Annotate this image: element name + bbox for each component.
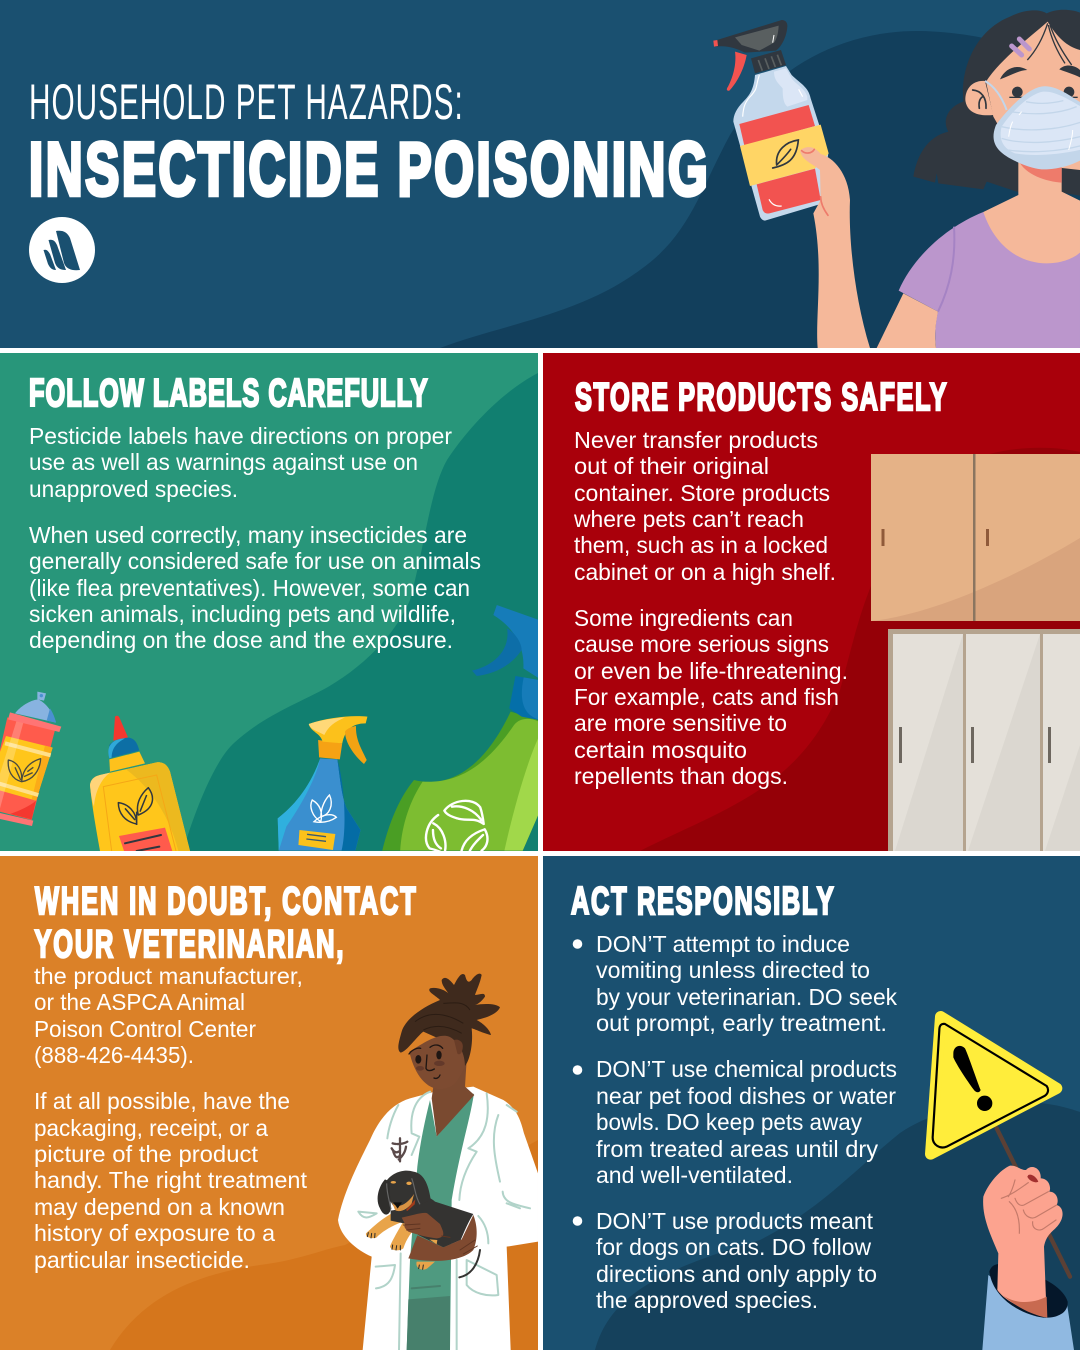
chin shadow — [1020, 163, 1062, 183]
text block: the approved species. — [596, 1287, 818, 1313]
text block: picture of the product — [34, 1141, 259, 1167]
puppy and arm — [366, 1171, 480, 1277]
heading: FOLLOW LABELS CAREFULLY — [29, 370, 428, 414]
text block: particular insecticide. — [34, 1247, 250, 1273]
text block: certain mosquito — [574, 737, 747, 763]
coat lines — [358, 1092, 530, 1350]
illustration: yellow bottle — [90, 716, 190, 851]
text block: or even be life-threatening. — [574, 658, 848, 684]
panel: act responsibly — [543, 856, 1080, 1350]
panel: follow labels carefully — [0, 353, 539, 852]
text block: Pesticide labels have directions on proper — [29, 423, 452, 449]
scrubs — [407, 1093, 474, 1350]
text block: unapproved species. — [29, 476, 238, 502]
text block: the product manufacturer, — [34, 963, 303, 989]
illustration: hand holding warning sign — [931, 1017, 1074, 1350]
arm — [408, 1215, 477, 1261]
text block: use as well as warnings against use on — [29, 449, 418, 475]
eyes — [1009, 87, 1078, 98]
text block: where pets can’t reach — [573, 506, 804, 532]
text block: Poison Control Center — [34, 1016, 256, 1042]
text block: generally considered safe for use on animals — [29, 548, 481, 574]
coat — [338, 1087, 538, 1350]
text block: packaging, receipt, or a — [34, 1115, 269, 1141]
text block: for dogs on cats. DO follow — [596, 1234, 871, 1260]
illustration: pesticide sprayers — [278, 605, 539, 852]
puppy body — [391, 1197, 473, 1247]
text block: out of their original — [574, 453, 769, 479]
green sprayer — [382, 605, 539, 852]
illustration: aerosol can — [0, 692, 61, 826]
neck — [432, 1060, 474, 1137]
text block: DON’T use products meant — [596, 1208, 873, 1234]
hair — [913, 10, 1080, 197]
text block: DON’T attempt to induce — [596, 931, 850, 957]
text block: vomiting unless directed to — [596, 957, 870, 983]
bullets — [573, 939, 582, 1226]
illustration: woman with spray bottle — [713, 10, 1080, 348]
text block: directions and only apply to — [596, 1261, 877, 1287]
text block: them, such as in a locked — [574, 532, 828, 558]
pole — [997, 1128, 1070, 1277]
text block: near pet food dishes or water — [596, 1083, 896, 1109]
illustration: upper cabinet — [871, 454, 1080, 621]
text block: depending on the dose and the exposure. — [29, 627, 453, 653]
puppy head — [385, 1171, 431, 1212]
panel: store products safely — [543, 353, 1080, 851]
emblem — [392, 1138, 407, 1162]
warning sign — [931, 1017, 1057, 1154]
title — [30, 84, 706, 198]
title: HOUSEHOLD PET HAZARDS: — [29, 74, 463, 130]
ear — [965, 81, 1007, 115]
text block: If at all possible, have the — [34, 1088, 290, 1114]
text block: out prompt, early treatment. — [596, 1010, 887, 1036]
hand — [983, 1166, 1063, 1318]
hair bun — [398, 974, 500, 1066]
sleeve — [982, 1264, 1074, 1350]
upper arm — [877, 293, 938, 348]
face — [409, 1036, 465, 1089]
text block: cabinet or on a high shelf. — [574, 559, 836, 585]
illustration: veterinarian with puppy — [338, 974, 538, 1350]
text block — [573, 427, 848, 789]
text block: by your veterinarian. DO seek — [596, 984, 897, 1010]
text block: Never transfer products — [574, 427, 818, 453]
spray bottle — [713, 20, 829, 221]
blue spray bottle — [278, 716, 367, 851]
text block: Some ingredients can — [574, 605, 793, 631]
text block: container. Store products — [574, 480, 830, 506]
text block: repellents than dogs. — [574, 763, 788, 789]
hand — [800, 147, 870, 348]
tail — [459, 1250, 480, 1277]
heading: STORE PRODUCTS SAFELY — [575, 374, 947, 418]
heading: WHEN IN DOUBT, CONTACT — [35, 878, 416, 922]
heading — [34, 878, 416, 965]
title: INSECTICIDE POISONING — [29, 127, 708, 211]
text block: from treated areas until dry — [596, 1136, 878, 1162]
text block: When used correctly, many insecticides are — [29, 522, 467, 548]
icon: logo — [29, 217, 95, 283]
neck and chest — [983, 160, 1080, 267]
text block: DON’T use chemical products — [596, 1056, 897, 1082]
text block: are more sensitive to — [574, 710, 787, 736]
heading: YOUR VETERINARIAN, — [34, 921, 343, 965]
text block: sicken animals, including pets and wildlife, — [29, 601, 456, 627]
text block: For example, cats and fish — [574, 684, 839, 710]
heading: ACT RESPONSIBLY — [571, 878, 834, 922]
face — [986, 22, 1080, 170]
text block: may depend on a known — [34, 1194, 285, 1220]
mask — [994, 86, 1080, 169]
puppy legs — [366, 1213, 435, 1270]
panel: header — [0, 0, 1080, 348]
text block — [34, 963, 307, 1273]
text block — [596, 931, 897, 1313]
text block: (like flea preventatives). However, some can — [29, 575, 470, 601]
text block: (888-426-4435). — [34, 1042, 194, 1068]
sleeve crease — [938, 227, 954, 312]
text block: and well-ventilated. — [596, 1162, 793, 1188]
text block: handy. The right treatment — [34, 1167, 307, 1193]
panel: when in doubt — [0, 856, 538, 1350]
text block: history of exposure to a — [34, 1220, 276, 1246]
hair clip — [1012, 39, 1029, 55]
text block: or the ASPCA Animal — [34, 989, 245, 1015]
text block: cause more serious signs — [574, 631, 829, 657]
text block — [29, 423, 481, 653]
illustration: lower cabinet — [888, 629, 1080, 851]
text block: bowls. DO keep pets away — [596, 1109, 862, 1135]
eyebrows — [1000, 65, 1080, 79]
shirt — [899, 212, 1080, 348]
hair strands — [1027, 23, 1072, 65]
